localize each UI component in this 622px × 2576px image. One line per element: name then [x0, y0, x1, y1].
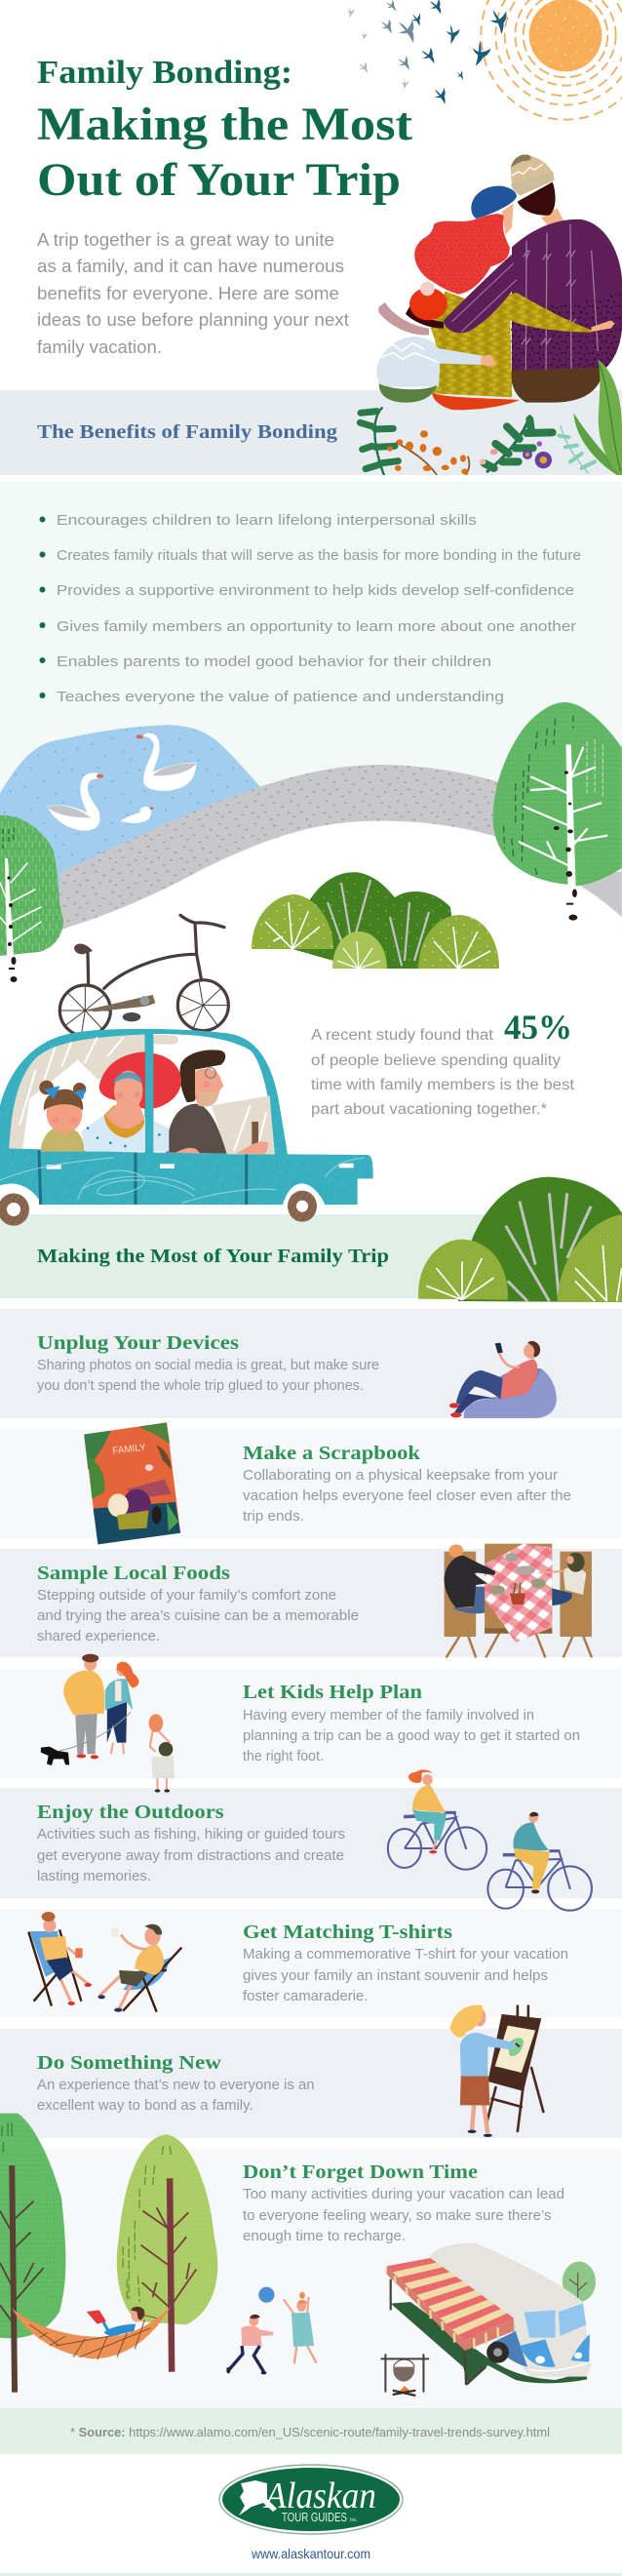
body text: Making a commemorative T-shirt for your vacation [243, 1947, 568, 1962]
icon: Alaska state shape [239, 2480, 277, 2516]
swan lower [47, 773, 103, 831]
panel: Sample Local Foods [0, 1549, 622, 1657]
illustration: birch tree, right [493, 702, 622, 921]
intro text: family vacation. [37, 337, 162, 357]
body text: planning a trip can be a good way to get it started on [243, 1728, 580, 1744]
windows [9, 1034, 275, 1154]
girl [284, 2292, 317, 2363]
icon: woman painting at easel [450, 2005, 543, 2137]
body text: and trying the area’s cuisine can be a memorable [37, 1608, 359, 1624]
left chair and woman [28, 1912, 92, 2006]
bullet 4: Gives family members an opportunity to learn more about one another [57, 618, 576, 635]
illustration: sun with dashed rings [481, 0, 622, 120]
heading band: Making the Most of Your Family Trip: Making the Most of Your Family Trip [37, 1246, 389, 1267]
body text: enough time to recharge. [243, 2229, 406, 2244]
illustration: bushes on heading band [418, 1177, 622, 1302]
intro text: ideas to use before planning your next [37, 310, 349, 330]
panel: Enjoy the Outdoors [0, 1788, 622, 1898]
body text: Too many activities during your vacation can lead [243, 2187, 564, 2202]
heading band: The Benefits of Family Bonding: The Benefits of Family Bonding [37, 421, 338, 443]
icon: parents with dog [41, 1654, 138, 1765]
bullet 6: Teaches everyone the value of patience and understanding [57, 689, 504, 705]
heading: Let Kids Help Plan [243, 1682, 423, 1703]
body text [37, 1588, 359, 1645]
car wheels [0, 1191, 317, 1226]
boy [226, 2315, 274, 2374]
logo: Alaskan Tour Guides: Inc. [350, 2517, 358, 2523]
logo: Alaskan Tour Guides: TOUR GUIDES [282, 2511, 347, 2524]
illustration: family hugging, seen from behind [376, 154, 622, 410]
heading band: Making the Most of Your Family Trip [0, 1214, 622, 1298]
food on table [490, 1553, 546, 1605]
panel: Make a Scrapbook [0, 1429, 622, 1538]
title: Making the Most [37, 99, 412, 150]
title [37, 55, 412, 206]
awning stripes [387, 2258, 514, 2341]
hammock [12, 2307, 171, 2359]
icon: trees with person in hammock [0, 2114, 217, 2393]
pond [0, 725, 261, 897]
panel: Let Kids Help Plan [0, 1669, 622, 1778]
callout: 45% statistic: 45% [504, 1008, 572, 1047]
road [59, 765, 622, 930]
icon: picnic table with two people [445, 1544, 592, 1657]
title: Out of Your Trip [37, 154, 401, 206]
panel: Unplug Your Devices [0, 1309, 622, 1418]
body text: excellent way to bond as a family. [37, 2098, 253, 2114]
heading: Get Matching T-shirts [243, 1922, 452, 1943]
source band: * Source: https://www.alamo.com/en_US/scenic-route/family-travel-trends-survey.html [70, 2425, 550, 2439]
panel: Don't Forget Down Time [0, 2149, 622, 2408]
yellow-green tree [117, 2134, 217, 2372]
body text: the right foot. [243, 1749, 324, 1764]
body text: gives your family an instant souvenir and helps [243, 1968, 548, 1984]
body text [243, 1947, 568, 2004]
driver [166, 1050, 268, 1154]
logo: Alaskan Tour Guides [219, 2465, 403, 2534]
callout: 45% statistic: A recent study found that [311, 1027, 494, 1044]
panel: benefits list [0, 481, 622, 939]
body text [37, 2078, 315, 2114]
body text: vacation helps everyone feel closer even after the [243, 1488, 571, 1504]
bullet 2: Creates family rituals that will serve as the basis for more bonding in the future [57, 547, 581, 564]
logo: Alaskan Tour Guides: Alaskan [262, 2476, 376, 2517]
body text: Activities such as fishing, hiking or guided tours [37, 1827, 345, 1843]
illustration: group of bushes [252, 872, 499, 969]
illustration: landscape with pond, swans and road [0, 725, 622, 1216]
body text: Sharing photos on social media is great, but make sure [37, 1358, 379, 1373]
body text: to everyone feeling weary, so make sure there’s [243, 2208, 552, 2224]
door seams, handles and scribbles [0, 1035, 364, 1205]
intro text [37, 230, 349, 357]
cygnet [120, 807, 153, 823]
bullet 1: Encourages children to learn lifelong interpersonal skills [57, 512, 477, 529]
icon: scrapbook cover: FAMILY [112, 1443, 147, 1456]
body text: An experience that’s new to everyone is an [37, 2078, 315, 2093]
heading: Sample Local Foods [37, 1563, 230, 1584]
mother [81, 1051, 181, 1152]
heading: Unplug Your Devices [37, 1332, 239, 1354]
icon: friends in folding chairs [28, 1912, 181, 2012]
swan upper [136, 733, 196, 791]
body text: you don’t spend the whole trip glued to your phones. [37, 1378, 364, 1394]
icon: children playing with a ball [226, 2287, 317, 2374]
callout: 45% statistic: time with family members is the best [311, 1077, 575, 1093]
icon: camper van with striped awning [387, 2243, 596, 2385]
person reading [87, 2307, 144, 2336]
intro text: A trip together is a great way to unite [37, 230, 334, 250]
body text [37, 1358, 379, 1394]
body text: get everyone away from distractions and create [37, 1848, 344, 1864]
icon: woman cycling [388, 1769, 486, 1870]
woman in striped shirt [539, 1553, 586, 1605]
body text [243, 1468, 571, 1525]
intro text: benefits for everyone. Here are some [37, 284, 339, 303]
callout: 45% statistic: part about vacationing together.* [311, 1101, 547, 1118]
body text: Having every member of the family involved in [243, 1708, 534, 1724]
heading: Do Something New [37, 2052, 221, 2074]
bullet 3: Provides a supportive environment to help kids develop self-confidence [57, 582, 574, 599]
icon: scrapbook cover [84, 1422, 180, 1544]
intro text: as a family, and it can have numerous [37, 257, 344, 276]
body text: lasting memories. [37, 1869, 151, 1884]
body text: Collaborating on a physical keepsake from your [243, 1468, 558, 1484]
body text [243, 1708, 580, 1764]
body text: foster camaraderie. [243, 1989, 369, 2004]
callout: 45% statistic [311, 1008, 575, 1118]
bike [59, 915, 228, 1036]
body text [37, 1827, 345, 1884]
icon: person on beanbag with phone [449, 1341, 557, 1418]
heading: Don’t Forget Down Time [243, 2161, 478, 2183]
heading: Make a Scrapbook [243, 1443, 421, 1464]
illustration: plants at the foot of the family [360, 359, 622, 478]
icon: child holding up a ball [149, 1714, 175, 1793]
body text: Stepping outside of your family’s comfort zone [37, 1588, 336, 1604]
green tree [0, 2114, 65, 2393]
body text: trip ends. [243, 1509, 304, 1525]
heading: Enjoy the Outdoors [37, 1802, 224, 1823]
website url: www.alaskantour.com [251, 2546, 370, 2561]
right chair and man [97, 1924, 181, 2012]
callout: 45% statistic: of people believe spending quality [311, 1052, 561, 1069]
heading band: The Benefits of Family Bonding [0, 390, 622, 475]
illustration: birch tree, left [0, 815, 63, 982]
illustration: flock of birds [344, 0, 513, 104]
icon: man cycling [487, 1812, 592, 1911]
car body [0, 1029, 373, 1205]
daughter [39, 1081, 86, 1152]
man in black sweater [445, 1544, 496, 1613]
body text [243, 2187, 564, 2244]
body text: shared experience. [37, 1629, 160, 1645]
icon: campfire with pot [381, 2354, 429, 2396]
panel: Get Matching T-shirts [0, 1909, 622, 2017]
bullet 5: Enables parents to model good behavior for their children [57, 654, 491, 670]
title: Family Bonding: [37, 55, 292, 91]
source band [0, 2408, 622, 2454]
awning valance [387, 2266, 514, 2351]
illustration: car with family and bike on roof [0, 915, 373, 1205]
panel: Do Something New [0, 2029, 622, 2138]
